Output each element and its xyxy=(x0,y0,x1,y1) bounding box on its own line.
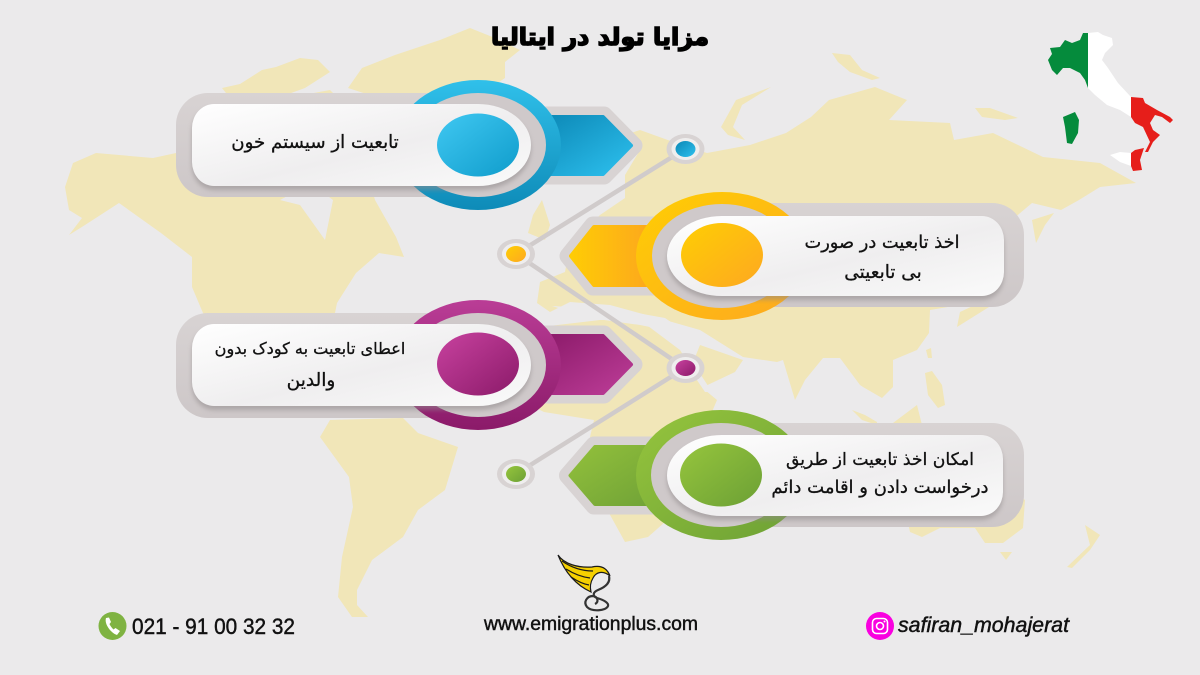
connector lines xyxy=(516,149,685,474)
arrow: purple xyxy=(540,334,634,395)
map: UK and Iceland xyxy=(528,200,550,240)
map: Arctic islands xyxy=(222,58,330,100)
connector dot: blue xyxy=(666,134,704,164)
text: والدین xyxy=(287,370,335,391)
icon: Italy flag map xyxy=(1048,32,1173,171)
connector dot: yellow xyxy=(497,239,535,269)
map: Southeast Asia islands xyxy=(852,410,877,425)
connector dot: green xyxy=(497,459,535,489)
map: Philippines xyxy=(925,371,945,408)
ring xyxy=(636,192,808,320)
pill shadow xyxy=(667,439,1003,520)
map: Japan xyxy=(957,305,989,327)
icon: phone xyxy=(98,612,126,640)
text: اعطای تابعیت به کودک بدون xyxy=(215,339,405,359)
map: Red Sea xyxy=(680,355,712,392)
icon: instagram xyxy=(866,612,894,640)
map: Hudson Bay xyxy=(280,190,333,240)
map: New Zealand xyxy=(1067,525,1100,568)
map: Eurasia xyxy=(680,87,1136,400)
map: Novaya Zemlya xyxy=(721,87,771,140)
band xyxy=(720,423,1024,527)
map: Siberian islands xyxy=(975,108,1018,120)
map: Borneo and New Guinea xyxy=(893,405,922,430)
text xyxy=(215,339,405,391)
circle xyxy=(680,444,762,506)
ring xyxy=(636,410,806,540)
panel: blue item xyxy=(176,80,634,210)
map: Australia xyxy=(905,480,1025,543)
circle xyxy=(681,223,763,287)
text: درخواست دادن و اقامت دائم xyxy=(771,477,989,498)
arrow: blue xyxy=(540,115,634,176)
map: Tasmania xyxy=(1000,552,1012,560)
map: Iberia and Europe xyxy=(537,130,790,330)
map: Mediterranean xyxy=(552,306,690,335)
band xyxy=(176,313,480,418)
pill xyxy=(667,216,1004,296)
map: South America xyxy=(320,418,458,617)
connector dot: purple xyxy=(666,353,704,383)
text: اخذ تابعیت در صورت xyxy=(804,232,960,253)
pill xyxy=(667,435,1003,516)
map: Arabia xyxy=(690,345,743,390)
text: تابعیت از سیستم خون xyxy=(231,132,399,153)
pill shadow xyxy=(192,328,531,410)
arrow: yellow xyxy=(568,225,660,287)
phone number: 021 - 91 00 32 32 xyxy=(132,614,295,639)
website: www.emigrationplus.com xyxy=(483,614,698,635)
title: مزایا تولد در ایتالیا xyxy=(491,23,709,51)
map: Taiwan xyxy=(926,348,932,358)
text xyxy=(771,450,989,498)
panel: yellow item xyxy=(568,192,1024,320)
circle xyxy=(437,114,519,176)
text: بی تابعیتی xyxy=(844,262,922,283)
band xyxy=(176,93,480,197)
map: Africa xyxy=(515,320,717,542)
text: امکان اخذ تابعیت از طریق xyxy=(786,450,974,470)
pill xyxy=(192,104,531,186)
band xyxy=(720,203,1024,307)
map: Greenland xyxy=(348,28,520,115)
pill shadow xyxy=(192,108,531,190)
circle xyxy=(437,332,519,396)
map: northern islands xyxy=(832,53,880,80)
icon: logo xyxy=(558,555,610,610)
map: Sakhalin xyxy=(1032,213,1054,243)
pill shadow xyxy=(667,220,1004,300)
ring xyxy=(395,80,561,210)
panel: purple item xyxy=(176,300,634,430)
map: North America xyxy=(65,90,404,400)
text xyxy=(804,232,960,283)
world map xyxy=(65,28,1136,617)
pill xyxy=(192,324,531,406)
arrow: green xyxy=(568,445,660,506)
instagram handle: safiran_mohajerat xyxy=(898,614,1070,637)
panel: green item xyxy=(568,410,1024,540)
ring xyxy=(395,300,561,430)
